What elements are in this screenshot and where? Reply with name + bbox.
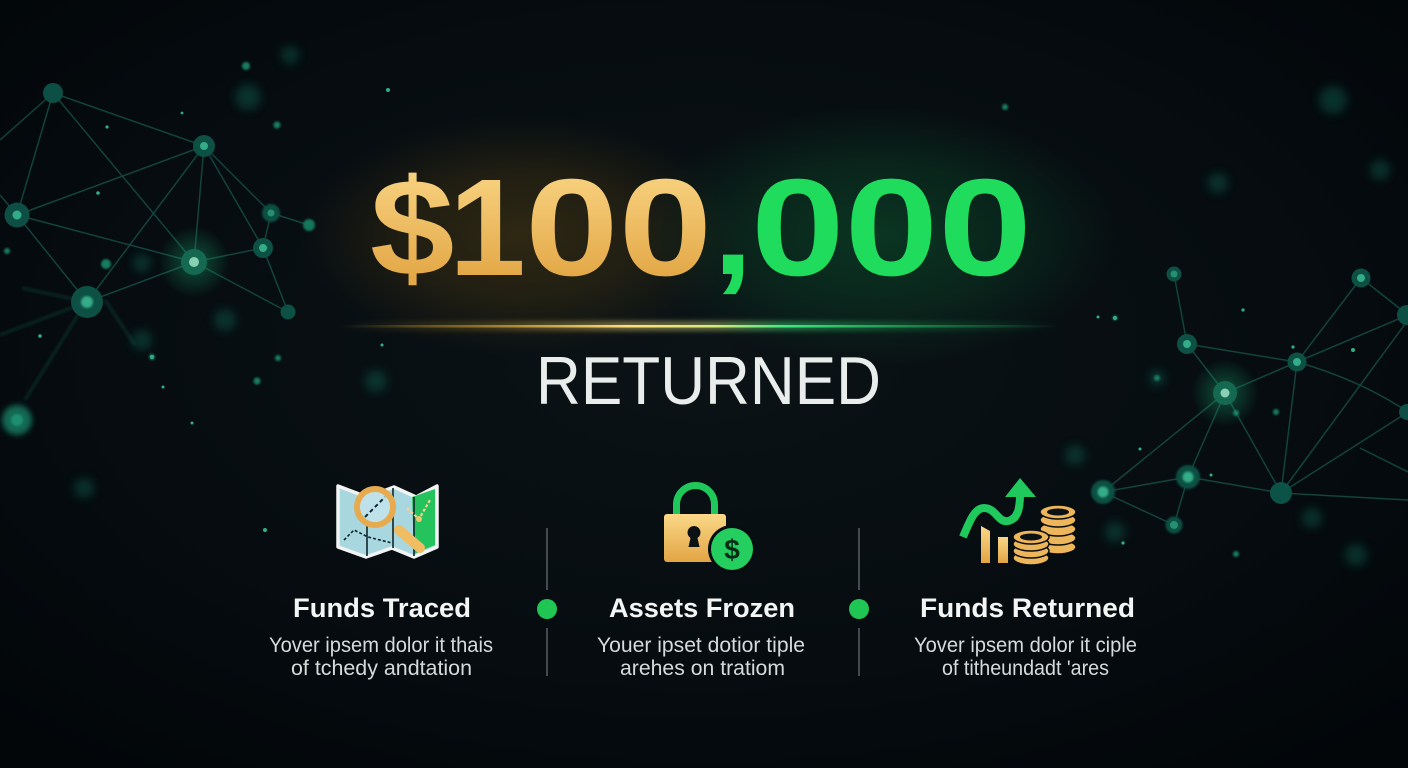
heading: Assets Frozen — [609, 593, 795, 623]
step text: assets frozen: arehes on tratiom — [620, 657, 785, 680]
step text: funds returned — [914, 593, 1137, 680]
step text: funds traced — [269, 593, 493, 680]
amount: green zeros: 000 — [751, 150, 1032, 305]
step text: funds returned: of titheundadt 'ares — [942, 657, 1109, 680]
subtitle: RETURNED — [536, 343, 881, 419]
description: Youer ipset dotior tiple — [597, 634, 805, 657]
floating particles — [4, 46, 1390, 566]
heading: Funds Traced — [293, 593, 471, 623]
icon: padlock with coin — [664, 486, 756, 573]
amount: green comma: , — [713, 156, 753, 302]
step separator 1 — [537, 528, 557, 676]
amount: gold zeros: 00 — [525, 150, 712, 305]
icon: padlock with coin: $ — [724, 534, 740, 565]
description: Yover ipsem dolor it thais — [269, 634, 493, 657]
step text: assets frozen — [597, 593, 805, 680]
amount: gold digit one: 1 — [449, 151, 526, 305]
step separator 2 — [849, 528, 869, 676]
step text: funds traced: of tchedy andtation — [291, 657, 472, 680]
icon: growth arrow with coins — [963, 478, 1076, 565]
description: Yover ipsem dolor it ciple — [914, 634, 1137, 657]
network: left cluster — [0, 83, 315, 435]
amount: gold dollar sign: $ — [370, 150, 454, 304]
heading: Funds Returned — [920, 593, 1135, 623]
headline amount — [370, 150, 1032, 305]
title glow — [300, 105, 1120, 365]
icon: map with magnifier — [338, 486, 437, 557]
network: right cluster — [1091, 266, 1408, 534]
glowing divider line — [340, 321, 1060, 331]
